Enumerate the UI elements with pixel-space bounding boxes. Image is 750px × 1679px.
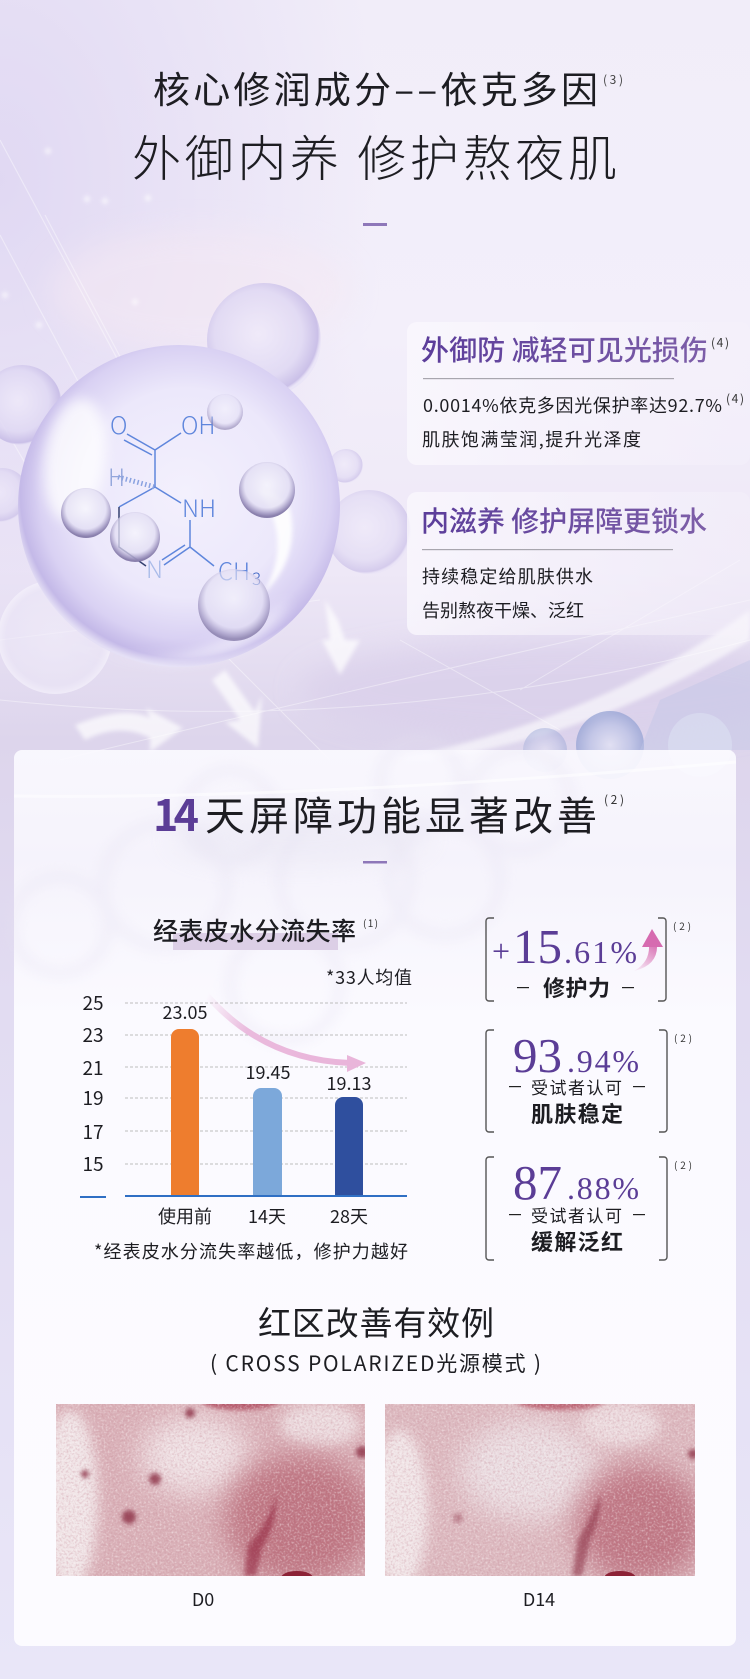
stat: redness relief — [486, 1155, 692, 1260]
stat: repair power: .61% — [564, 934, 637, 970]
bar chart: 25 — [82, 989, 104, 1016]
stat: skin stability: 肌肤稳定 — [531, 1097, 623, 1129]
molecular structure: H — [108, 458, 125, 493]
panel: inner nourishment — [407, 492, 750, 635]
stat: repair power: 修护力 — [543, 971, 610, 1003]
stat: redness relief: (2) — [674, 1157, 692, 1172]
panel: results card — [12, 740, 736, 1646]
bar chart: 14天 — [248, 1203, 286, 1229]
water droplets — [61, 394, 295, 641]
stat: redness relief: 缓解泛红 — [531, 1225, 623, 1257]
molecular structure: NH — [182, 489, 216, 524]
label: D0: D0 — [192, 1586, 214, 1612]
heading: 14 days: 天屏障功能显著改善 — [205, 784, 597, 842]
title: core ingredient: (3) — [603, 71, 623, 88]
divider dash — [363, 861, 387, 864]
stat: skin stability: 93 — [513, 1028, 562, 1083]
title: core ingredient: 核心修润成分––依克多因 — [153, 60, 598, 114]
heading: 14 days: 14 — [153, 782, 199, 844]
photo: day 0 — [56, 1404, 365, 1576]
stat: repair power: (2) — [673, 918, 691, 933]
icon: background bubbles — [0, 283, 411, 694]
bar chart: 21 — [82, 1054, 104, 1081]
molecular structure: 3 — [252, 565, 261, 590]
bar chart: 19 — [82, 1084, 104, 1111]
icon: dark bubbles lower right — [523, 660, 750, 779]
footnote: *经表皮水分流失率越低，修护力越好 — [94, 1238, 408, 1264]
heading: main: 外御内养 修护熬夜肌 — [132, 120, 617, 191]
photo: day 14 — [385, 1404, 695, 1576]
panel: outer defense: 0.0014%依克多因光保护率达92.7% — [423, 392, 722, 418]
icon: large molecule bubble — [18, 345, 340, 667]
stat: repair power: 15 — [513, 919, 562, 974]
molecular structure — [108, 406, 261, 590]
panel: outer defense: 外御防 减轻可见光损伤 — [421, 329, 708, 369]
bar chart: 19.13 — [327, 1070, 371, 1096]
stat: redness relief: 87 — [513, 1155, 562, 1210]
heading: 14 days: (2) — [604, 791, 624, 808]
molecular structure: N — [146, 550, 163, 585]
stat: redness relief: 受试者认可 — [531, 1202, 622, 1227]
bar chart: 23.05 — [163, 999, 207, 1025]
bar chart: 使用前 — [158, 1203, 212, 1229]
stat: skin stability: (2) — [674, 1030, 692, 1045]
note: sample size: *33人均值 — [326, 964, 412, 990]
bar chart — [80, 989, 407, 1229]
panel: inner nourishment: 内滋养 修护屏障更锁水 — [421, 500, 707, 540]
stat: redness relief: .88% — [567, 1170, 639, 1206]
panel: inner nourishment: 持续稳定给肌肤供水 — [422, 563, 593, 589]
decorative swoosh — [390, 610, 750, 760]
icon: up arrow — [634, 929, 663, 971]
subheading: light mode: ( CROSS POLARIZED光源模式 ) — [210, 1348, 541, 1378]
arrow: decrease trend — [205, 993, 366, 1072]
stat: skin stability: .94% — [567, 1043, 639, 1079]
panel: outer defense: (4) — [711, 334, 729, 351]
molecular structure: OH — [181, 406, 215, 441]
bar chart: 23 — [82, 1021, 104, 1048]
bar chart: 28天 — [330, 1203, 368, 1229]
panel: inner nourishment: 告别熬夜干燥、泛红 — [422, 597, 584, 623]
bar chart: 19.45 — [246, 1059, 290, 1085]
stat: repair power: + — [492, 933, 510, 969]
chart title: 经表皮水分流失率 — [153, 912, 356, 948]
chart title: (1) — [363, 915, 378, 930]
panel: outer defense: 肌肤饱满莹润,提升光泽度 — [422, 426, 641, 452]
heading: redness improvement: 红区改善有效例 — [258, 1297, 494, 1345]
stat: skin stability — [486, 1028, 692, 1132]
panel: outer defense: (4) — [726, 390, 744, 407]
bar chart: 17 — [82, 1118, 104, 1145]
stat: repair power — [486, 918, 691, 1003]
stat: skin stability: 受试者认可 — [531, 1074, 622, 1099]
bar chart: 15 — [82, 1150, 104, 1177]
molecular structure: CH — [218, 552, 250, 587]
divider dash — [363, 223, 387, 226]
panel: outer defense — [407, 322, 750, 465]
icon: white flow arrows — [75, 600, 360, 752]
label: D14: D14 — [523, 1586, 555, 1612]
molecular structure: O — [110, 406, 127, 441]
